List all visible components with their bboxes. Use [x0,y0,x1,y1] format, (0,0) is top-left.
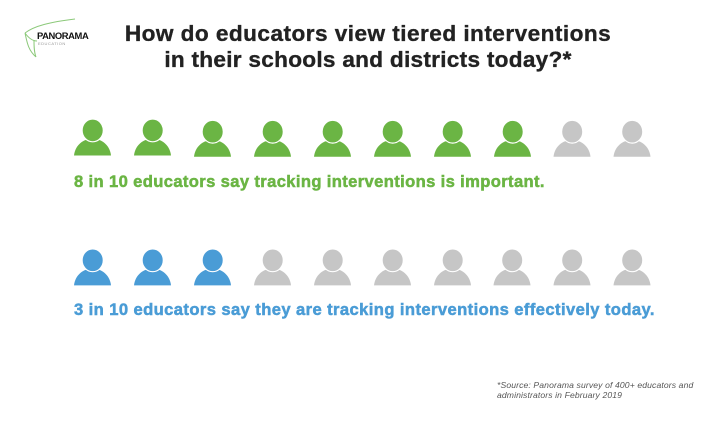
source note: administrators in February 2019 [497,390,622,400]
title: How do educators view tiered interventions [125,20,611,46]
title: in their schools and districts today?* [164,47,572,72]
logo: Panorama Education: EDUCATION [38,40,66,46]
title [125,20,611,72]
caption: 8 in 10: 8 in 10 educators say tracking interventions is important. [74,172,545,190]
caption: 3 in 10: 3 in 10 educators say they are tracking interventions effectively today. [74,300,655,319]
source note: *Source: Panorama survey of 400+ educators and [497,380,693,390]
logo: Panorama Education [24,18,88,58]
logo: Panorama Education: PANORAMA [37,30,88,40]
row 1 people [74,120,650,157]
source note [497,380,694,400]
row 2 people [74,250,650,286]
